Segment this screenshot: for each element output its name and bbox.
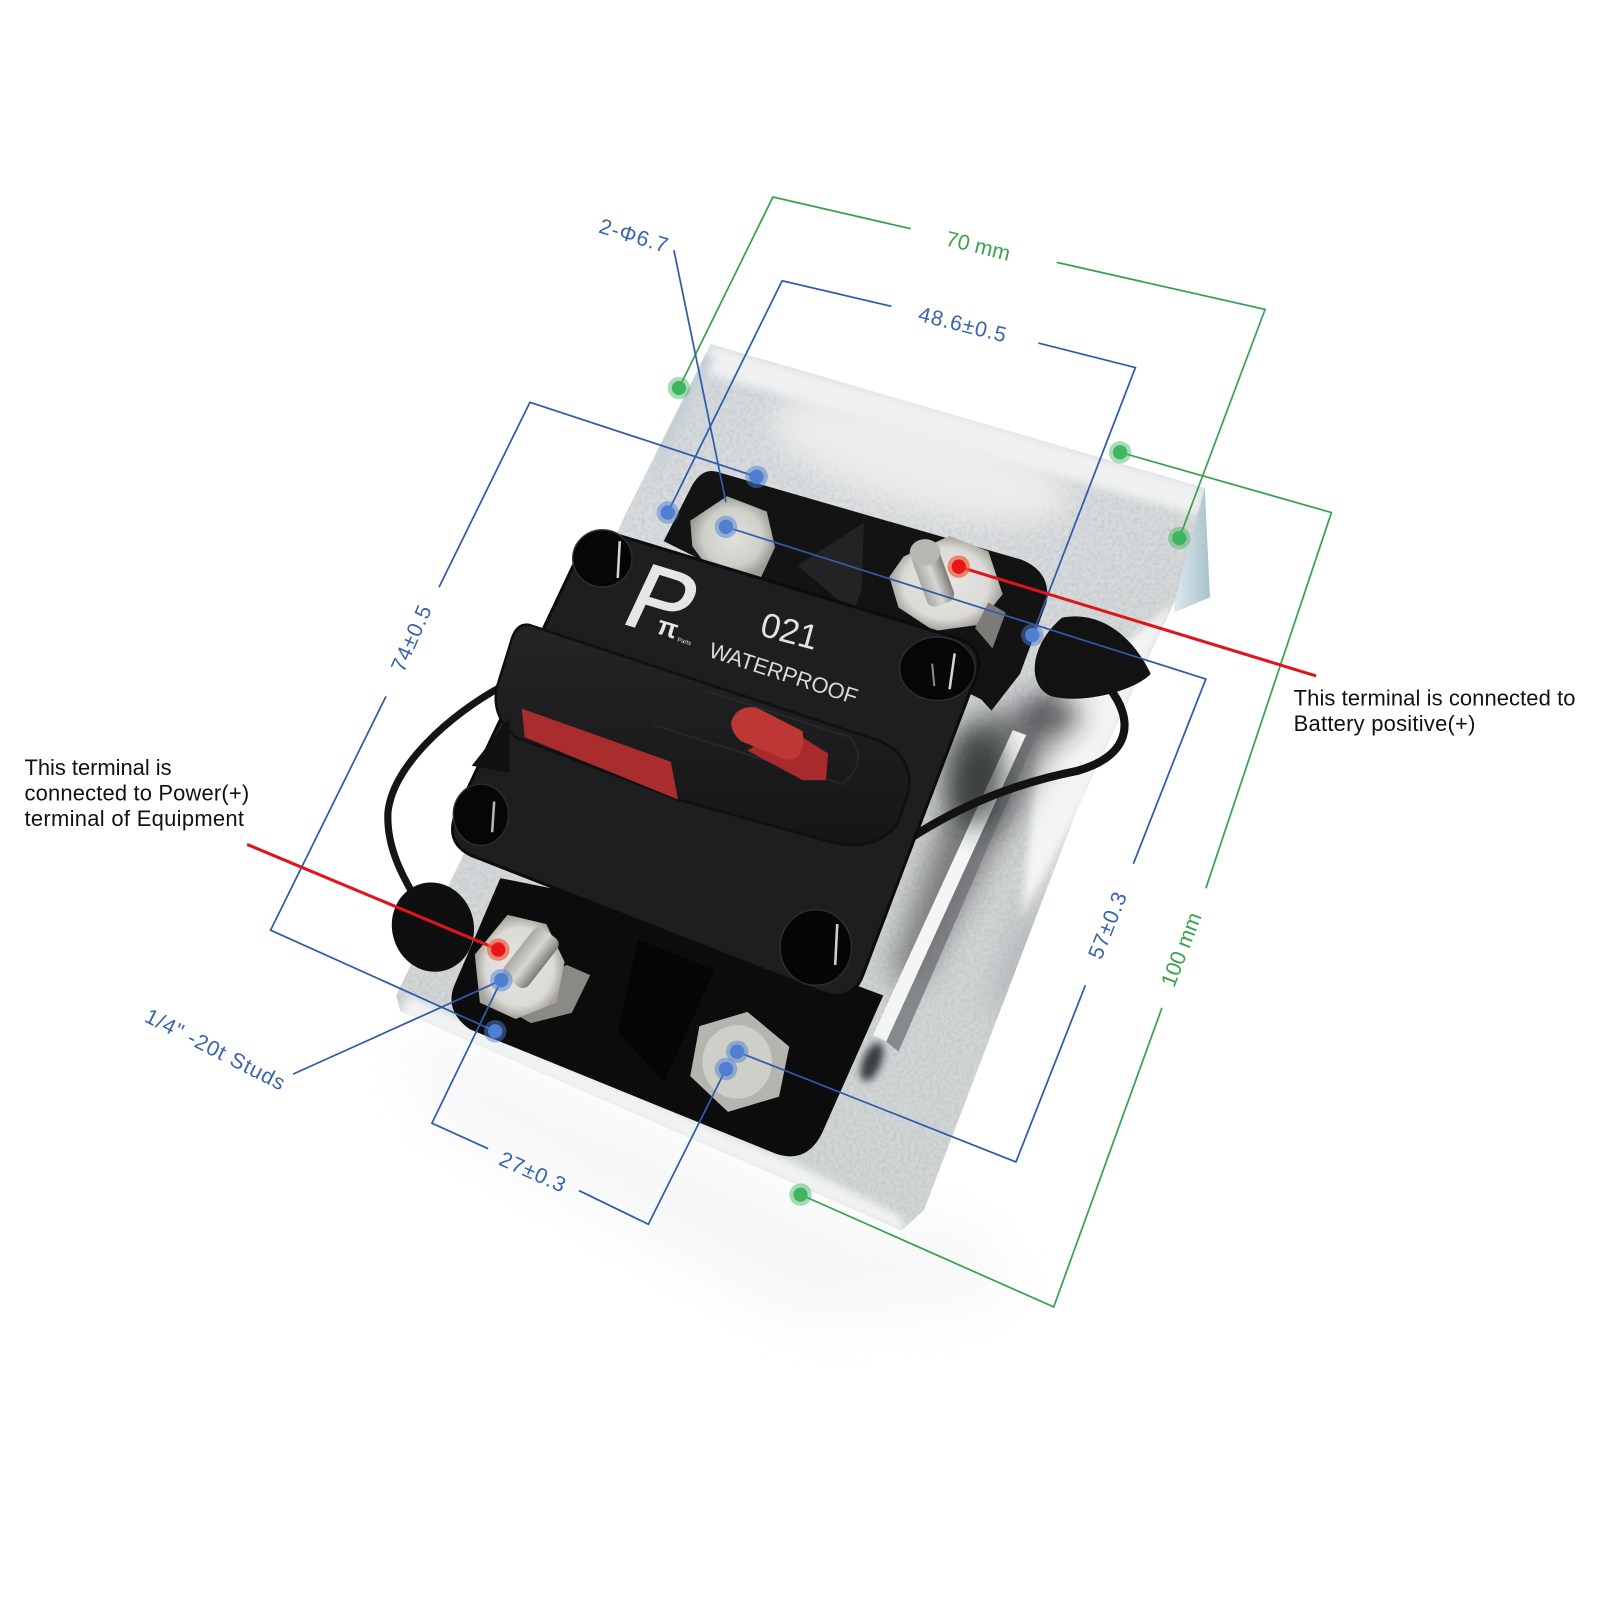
bracket reflections	[388, 337, 1215, 1246]
dimension: 100 mm: 100 mm	[1156, 909, 1207, 990]
callout: equipment power terminal: terminal of Equipment	[25, 806, 244, 831]
dimension: 48.6 ± 0.5	[657, 281, 1135, 646]
dimension: 74 ± 0.5: 74±0.5	[386, 601, 437, 675]
top-right stud and nut	[889, 536, 1006, 648]
cord right	[912, 686, 1125, 837]
metal bracket	[388, 337, 1215, 1246]
inner switch recess outline	[653, 690, 858, 784]
triangle mark	[472, 718, 510, 773]
dimension: 70 mm: 70 mm	[943, 227, 1013, 266]
screw bottom-left	[453, 784, 508, 845]
brand logo P: P	[610, 545, 714, 659]
screw top-right	[900, 637, 975, 700]
brand logo P: Parts	[676, 636, 692, 647]
callout: mounting hole diameter	[596, 214, 726, 502]
waterproof text: WATERPROOF	[706, 638, 861, 709]
callout: stud size	[141, 969, 513, 1096]
screw bottom-right	[780, 910, 852, 985]
breaker upper terminal block	[664, 471, 1047, 711]
callout: battery positive terminal	[948, 555, 1575, 736]
bracket plate	[396, 344, 1205, 1230]
breaker lower terminal block	[451, 878, 883, 1156]
dimension: 70 mm	[668, 197, 1265, 549]
dimension: 74 ± 0.5	[271, 402, 768, 1042]
rubber cap left	[382, 873, 484, 981]
fold strip	[873, 730, 1026, 1041]
dimension: 57 ± 0.3	[715, 516, 1206, 1162]
terminal divider top	[797, 523, 864, 613]
dimension: 27 ± 0.3	[432, 980, 737, 1224]
top-left hex bolt	[690, 496, 775, 578]
terminal divider bottom	[618, 939, 715, 1082]
infographic canvas	[24, 196, 1574, 1308]
brand logo P: π	[654, 610, 682, 645]
shadow under bracket	[408, 1021, 1021, 1317]
dimension: 48.6 ± 0.5: 48.6±0.5	[916, 302, 1010, 347]
red slider	[522, 709, 678, 799]
callout: equipment power terminal: This terminal is	[25, 755, 172, 780]
screw top-left	[573, 530, 632, 587]
callout: mounting hole diameter: 2-Φ6.7	[596, 214, 672, 258]
bracket right flange	[1174, 488, 1210, 613]
bottom-right hex bolt	[690, 1012, 789, 1112]
dimension: 27 ± 0.3: 27±0.3	[496, 1147, 570, 1198]
switch guard band	[496, 625, 909, 845]
cover panel	[453, 530, 978, 995]
callout: stud size: 1/4" -20t Studs	[141, 1004, 290, 1096]
callout: equipment power terminal	[25, 755, 510, 961]
model number 021: 021	[757, 606, 822, 658]
bottom-left stud and nut	[475, 915, 590, 1023]
red button	[731, 707, 828, 780]
dimension: 57 ± 0.3: 57±0.3	[1084, 888, 1132, 963]
cord left	[388, 686, 502, 904]
callout: battery positive terminal: This terminal is connected to	[1294, 686, 1575, 711]
dimension: 100 mm	[789, 441, 1331, 1307]
callout: equipment power terminal: connected to Power(+)	[25, 780, 249, 805]
rubber cap right	[1035, 616, 1151, 699]
callout: battery positive terminal: Battery positive(+)	[1294, 711, 1475, 736]
